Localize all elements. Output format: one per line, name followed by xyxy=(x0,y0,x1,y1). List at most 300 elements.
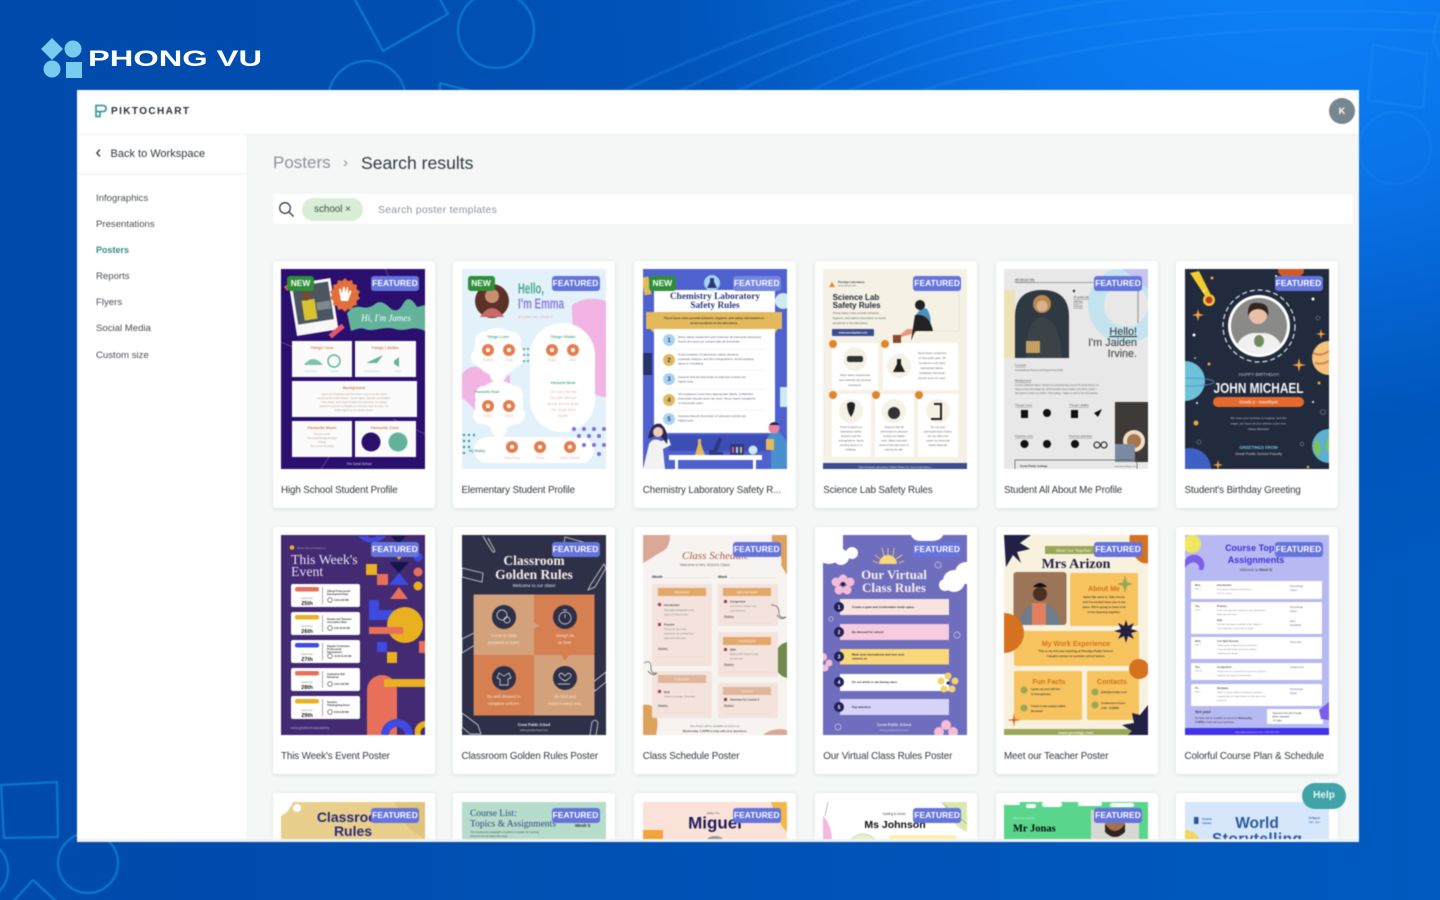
poster thumbnail: Miguel xyxy=(688,814,742,832)
poster thumbnail: Come to class xyxy=(491,633,516,638)
poster thumbnail: sentences, try to break them xyxy=(664,632,694,636)
poster thumbnail: alone in a building. xyxy=(678,362,704,366)
poster thumbnail: Quiz xyxy=(664,690,670,694)
poster thumbnail: Wednesday, 1:30PM to help with your questions. xyxy=(683,729,747,733)
card: Student All About Me Profile xyxy=(996,261,1158,508)
poster thumbnail: Practice xyxy=(664,622,675,626)
breadcrumb: › xyxy=(343,154,348,171)
poster thumbnail: magic, we hope all your wishes come true. xyxy=(1230,422,1286,426)
card title: Colorful Course Plan & Schedule xyxy=(1184,750,1324,762)
poster thumbnail: Getting to know xyxy=(883,812,906,816)
poster thumbnail: Do not drink or eat during class xyxy=(852,680,898,684)
poster thumbnail: www.prestigelab.com xyxy=(838,330,868,334)
poster thumbnail: Practice xyxy=(1216,605,1227,608)
poster thumbnail: Chemistry Laboratory xyxy=(670,292,760,302)
poster thumbnail: hygiene, and safety information to avoid xyxy=(833,316,886,320)
poster thumbnail: I grew up in Argentina and lived there most of my life before xyxy=(321,393,388,396)
poster thumbnail: "Success is the sum of small xyxy=(1272,712,1301,715)
poster thumbnail: 2:30PM to help with your questions. xyxy=(1194,721,1235,724)
poster thumbnail: Class Rules xyxy=(862,580,926,595)
poster thumbnail: and minimize all chemical xyxy=(839,378,871,382)
poster thumbnail: Background xyxy=(1015,378,1031,382)
poster thumbnail: This Week's xyxy=(291,552,358,567)
poster thumbnail: Welcome to Week 5! xyxy=(1239,568,1272,572)
badge: new: NEW xyxy=(653,278,672,288)
poster thumbnail: September xyxy=(301,597,313,600)
breadcrumb: Posters xyxy=(273,153,331,172)
poster thumbnail: Background xyxy=(343,386,366,390)
poster thumbnail: Notes: xyxy=(724,704,734,708)
poster thumbnail: your reference. xyxy=(730,610,746,612)
badge: featured: FEATURED xyxy=(372,278,418,288)
poster thumbnail: I'm from California where I finished my schooling last year at The Great School. I'm xyxy=(1015,384,1099,387)
poster thumbnail: building. xyxy=(846,448,857,452)
poster thumbnail: Things I dislike xyxy=(371,346,399,350)
poster thumbnail: Bullet points helped to give xyxy=(730,653,759,656)
poster thumbnail: efforts, repeated." xyxy=(1272,716,1290,718)
poster thumbnail: Welcome to Mrs. Arizon's Class! xyxy=(680,563,730,567)
poster thumbnail: Hello, I'm xyxy=(707,811,719,815)
poster thumbnail: Assignments xyxy=(1227,555,1284,565)
poster thumbnail: left panel. xyxy=(1216,699,1226,702)
badge: featured xyxy=(913,276,961,290)
badge: featured xyxy=(913,542,961,556)
poster thumbnail: Feb 2 xyxy=(1194,610,1201,612)
poster thumbnail: Be kind and xyxy=(554,694,576,699)
poster thumbnail xyxy=(280,801,426,840)
poster thumbnail: Things I love xyxy=(310,346,334,350)
poster thumbnail: Tue, xyxy=(1194,605,1200,608)
poster thumbnail: Never leave containers xyxy=(918,351,947,355)
poster thumbnail: 10 years old • Grade 5 xyxy=(518,315,552,319)
poster thumbnail: 26th xyxy=(301,629,313,635)
card title: Elementary Student Profile xyxy=(462,484,575,496)
poster thumbnail: 5am - 6pm xyxy=(1309,822,1320,824)
logo: Phong Vu xyxy=(41,38,262,78)
poster thumbnail: Notes: xyxy=(724,615,734,619)
poster thumbnail: About Me xyxy=(1088,586,1120,593)
poster thumbnail: Mrs Arizon will be available at school on xyxy=(690,724,740,728)
poster thumbnail: Great School Lab xyxy=(838,284,857,288)
poster thumbnail: extinguishers. Avoid xyxy=(839,438,864,442)
navigation list: Custom size xyxy=(96,350,149,361)
poster thumbnail: toxic. Wash exposed xyxy=(881,438,907,442)
sidebar xyxy=(77,135,248,839)
poster thumbnail: 4 xyxy=(667,398,671,404)
poster thumbnail: Subject Coverage: Chemistry xyxy=(664,696,696,698)
poster thumbnail: Use lecture number 1 as xyxy=(730,605,757,608)
poster thumbnail: Week 5 xyxy=(574,823,590,828)
poster thumbnail: The Lord of the Rings xyxy=(310,445,335,448)
poster thumbnail: 28th xyxy=(301,685,313,691)
card: Classroom Golden Rules Poster xyxy=(453,527,615,774)
poster thumbnail: 27th xyxy=(301,657,313,663)
poster thumbnail: Noise xyxy=(395,369,402,373)
poster thumbnail: chemicals of unknown xyxy=(880,430,908,434)
poster thumbnail: 4 xyxy=(838,680,841,686)
poster thumbnail: Swimming xyxy=(305,369,318,373)
poster thumbnail: Recordings xyxy=(1290,687,1303,691)
poster thumbnail: prepared to learn. xyxy=(487,640,520,645)
poster thumbnail: Hello, xyxy=(518,280,544,298)
navigation list: Flyers xyxy=(96,297,122,308)
logo wordmark: PHONG VU xyxy=(88,46,262,71)
poster thumbnail: Great School Academy xyxy=(297,546,326,550)
poster thumbnail: Meet our Teacher xyxy=(1056,548,1091,553)
poster thumbnail: My Work Experience xyxy=(1042,641,1110,648)
badge: featured xyxy=(1094,542,1142,556)
poster thumbnail: working alone in a xyxy=(840,443,863,447)
poster thumbnail: Assignment xyxy=(730,600,745,604)
poster thumbnail: Forrest Gump xyxy=(314,433,330,436)
poster thumbnail: Favourite Book xyxy=(550,381,575,385)
poster thumbnail: TUESDAY xyxy=(674,678,690,682)
filter chip xyxy=(302,198,363,221)
poster thumbnail xyxy=(642,534,788,736)
navigation list xyxy=(96,193,155,361)
poster thumbnail: julie@prestige.com xyxy=(1100,690,1127,694)
poster thumbnail: toxicity are highly xyxy=(883,434,906,438)
poster thumbnail: Topics & Assignments xyxy=(470,820,556,830)
poster thumbnail: I taught science at a private school before. xyxy=(1047,654,1105,658)
poster thumbnail: www.greatschool.com xyxy=(880,728,909,732)
poster thumbnail: September xyxy=(301,681,313,684)
poster thumbnail: Video Games xyxy=(560,456,580,460)
poster thumbnail: All About Me xyxy=(1015,278,1035,282)
poster thumbnail: and I'm excited have you in my xyxy=(1083,600,1126,604)
poster thumbnail: September xyxy=(301,709,313,712)
poster thumbnail: complete uniform. xyxy=(487,701,520,706)
poster thumbnail: accidents in the laboratory. xyxy=(833,321,869,325)
poster thumbnail: Golden Rules xyxy=(495,567,572,582)
poster thumbnail: If there are any extra sentences, try to break them xyxy=(1216,609,1265,612)
poster thumbnail xyxy=(461,534,607,736)
bottom edge line xyxy=(77,839,1359,842)
poster thumbnail: - R Collier xyxy=(1272,720,1282,722)
poster thumbnail xyxy=(822,534,968,736)
poster thumbnail: showers and fire xyxy=(841,434,862,438)
poster thumbnail: Summary for Lecture 2 xyxy=(730,698,760,702)
card: Miguel xyxy=(634,793,796,839)
poster thumbnail: 3:00-5:00 PM xyxy=(334,599,349,602)
poster thumbnail: Regular Conference xyxy=(327,645,350,648)
poster thumbnail: best in 2-3 lines of text. xyxy=(664,614,689,616)
poster thumbnail: containers must have xyxy=(919,361,946,365)
poster thumbnail: Wed, xyxy=(1194,640,1201,643)
poster thumbnail: Hi, I'm James xyxy=(360,313,411,323)
poster thumbnail: dawn@greatschool.com | +00 000 000 xyxy=(1234,730,1279,734)
poster thumbnail: outcomes for the topics this week. xyxy=(470,835,507,838)
poster thumbnail: Notes xyxy=(1290,588,1297,592)
poster thumbnail: Things I Dislike xyxy=(550,335,575,339)
poster thumbnail: Official Professional xyxy=(327,590,350,593)
poster thumbnail: Know locations of xyxy=(840,425,862,429)
poster thumbnail: Avoid skin and eye contact with all chemicals. xyxy=(678,340,740,344)
poster thumbnail: leaving the lab. xyxy=(885,448,904,452)
badge: featured: FEATURED xyxy=(1095,278,1141,288)
poster thumbnail: Science Lab xyxy=(833,293,880,302)
poster thumbnail xyxy=(642,268,788,470)
poster thumbnail: 2 xyxy=(667,358,671,364)
poster thumbnail: GREETINGS FROM xyxy=(1239,445,1278,450)
card: Mr Jonas xyxy=(996,793,1158,839)
card: This Week's Event Poster xyxy=(272,527,434,774)
poster thumbnail: Wear safety equipments xyxy=(840,373,871,377)
poster thumbnail: eyewash stations, and fire extinguishers. Avoid working xyxy=(678,357,754,361)
badge: new xyxy=(287,276,314,290)
poster thumbnail: Great Public School xyxy=(877,722,912,727)
card: Elementary Student Profile xyxy=(453,261,615,508)
poster thumbnail: 3:00-5:00 PM xyxy=(334,683,349,686)
icon: magnifier xyxy=(278,201,294,218)
poster thumbnail: of chemicals open. xyxy=(678,401,704,405)
poster thumbnail: Zoom link xyxy=(1290,640,1301,644)
badge: featured xyxy=(1274,276,1322,290)
poster thumbnail: I have a new puppy called xyxy=(1031,704,1066,708)
poster thumbnail: Use the Link feature available at the toolbar to xyxy=(1216,623,1262,626)
poster thumbnail: Hello! xyxy=(1109,326,1137,338)
poster thumbnail: Do not utilize the xyxy=(928,434,949,438)
poster thumbnail: Parents and Teachers xyxy=(327,618,352,621)
poster thumbnail: areas of the skin prior to xyxy=(879,443,910,447)
poster thumbnail: Recordings xyxy=(1290,605,1303,609)
poster thumbnail: Pizza xyxy=(504,414,513,418)
poster thumbnail: Notes: xyxy=(658,704,668,708)
poster thumbnail: Teachers xyxy=(327,701,338,704)
poster thumbnail: JOHN MICHAEL xyxy=(1213,380,1303,397)
poster thumbnail: in Georgetown. xyxy=(1031,692,1052,696)
poster thumbnail: Favourite Music xyxy=(308,426,336,430)
poster thumbnail: Safety Rules xyxy=(833,301,881,310)
poster thumbnail: This introductory paragraph is excellent to explain the learning xyxy=(470,831,539,834)
card title: Chemistry Laboratory Safety R... xyxy=(643,484,781,496)
badge: featured: FEATURED xyxy=(372,810,418,820)
card title: Class Schedule Poster xyxy=(643,750,739,762)
poster thumbnail: class. We're going to have a lot xyxy=(1083,605,1125,609)
poster thumbnail: I'm Emma xyxy=(518,296,564,312)
avatar xyxy=(1329,98,1355,124)
poster thumbnail: Classroom xyxy=(317,809,389,825)
poster thumbnail: Mrs Arizon xyxy=(1042,557,1111,572)
poster thumbnail: 16 years old xyxy=(1074,295,1089,299)
poster thumbnail: Favourite Food xyxy=(474,390,499,394)
poster thumbnail: on time. xyxy=(557,640,572,645)
poster thumbnail: Great Public College xyxy=(1020,464,1048,468)
card: Ms Johnson xyxy=(815,793,977,839)
navigation list: Social Media xyxy=(96,323,151,334)
application window xyxy=(77,90,1359,842)
poster thumbnail: Great Public School Faculty xyxy=(1235,452,1282,456)
poster thumbnail xyxy=(822,802,968,840)
card title: This Week's Event Poster xyxy=(281,750,390,762)
top bar xyxy=(77,90,1359,135)
poster thumbnail: insert hyperlinks to your text or image. xyxy=(1216,627,1254,630)
poster thumbnail: Pay attention xyxy=(852,705,871,709)
poster thumbnail: Introduction xyxy=(664,603,680,607)
poster thumbnail: sewer for chemical xyxy=(927,438,950,442)
card title: Student's Birthday Greeting xyxy=(1184,484,1301,496)
navigation list: Reports xyxy=(96,271,130,282)
poster thumbnail: Course List: xyxy=(470,809,516,819)
poster thumbnail: Always be xyxy=(555,633,575,638)
poster thumbnail: Football xyxy=(329,369,339,373)
poster thumbnail xyxy=(1184,268,1330,470)
poster thumbnail: Rehearsal xyxy=(327,676,339,679)
poster thumbnail: This is my 3rd year teaching at Prestige Public School. xyxy=(1038,649,1114,653)
poster thumbnail: Week xyxy=(718,575,728,579)
poster thumbnail: All containers must have appropriate labels. Unlabeled xyxy=(678,392,753,396)
badge: featured: FEATURED xyxy=(1276,544,1321,554)
poster thumbnail: 160 lbs xyxy=(1074,300,1083,304)
poster thumbnail: Fun Facts xyxy=(1032,679,1066,686)
card: World Storytelling xyxy=(1176,793,1338,839)
poster thumbnail: 1 xyxy=(667,338,671,344)
poster thumbnail: exposures. xyxy=(848,383,862,387)
card title: High School Student Profile xyxy=(281,484,398,496)
poster thumbnail: FRIDAY xyxy=(741,690,754,694)
poster thumbnail: down into more lines. xyxy=(1216,613,1238,616)
poster thumbnail: 2:00 - 3:00PM xyxy=(1101,706,1120,710)
poster thumbnail: 9:00-10:00 AM xyxy=(334,627,350,630)
poster thumbnail: Quiz xyxy=(1290,619,1296,623)
poster thumbnail: Assignment xyxy=(1216,666,1231,669)
poster thumbnail: down into more lines. xyxy=(664,637,687,640)
help button xyxy=(1302,783,1346,809)
poster thumbnail: Computational Science and Engineering (CSE) xyxy=(1015,369,1063,372)
poster thumbnail: September xyxy=(301,653,313,656)
poster thumbnail: 2-3 lines of text. xyxy=(1216,592,1232,595)
poster thumbnail: Prestige Laboratory xyxy=(838,280,865,284)
poster thumbnail: Things I Love xyxy=(487,335,509,339)
poster thumbnail: www.greatcollege.com xyxy=(1114,465,1136,468)
badge: featured xyxy=(1094,276,1142,290)
poster thumbnail xyxy=(1003,534,1149,736)
breadcrumb xyxy=(273,153,474,173)
card: Meet our Teacher Poster xyxy=(996,527,1158,774)
poster thumbnail xyxy=(280,268,426,470)
filter chip: school × xyxy=(314,204,351,215)
poster thumbnail: maximize the impact of information. xyxy=(1216,674,1251,677)
poster thumbnail: Association Meet xyxy=(327,621,347,624)
poster thumbnail: Fri, xyxy=(1194,687,1199,690)
poster thumbnail: Know locations of laboratory safety showers, xyxy=(678,352,739,356)
badge: featured xyxy=(552,542,600,556)
poster thumbnail: WEDNESDAY xyxy=(736,590,758,594)
poster thumbnail: Central xyxy=(1202,817,1211,821)
poster thumbnail: Bugs xyxy=(548,358,556,362)
poster thumbnail xyxy=(1184,534,1330,736)
card: Course List xyxy=(453,793,615,839)
poster thumbnail: My Hobby xyxy=(468,449,485,453)
poster thumbnail: We hope your birthday is magical, and like xyxy=(1230,416,1286,420)
poster thumbnail: Notes: xyxy=(724,663,734,667)
poster thumbnail: Flowers xyxy=(482,358,494,362)
poster thumbnail: These basic rules provide behavior, xyxy=(833,311,880,315)
poster thumbnail: Recordings xyxy=(1290,584,1303,588)
poster thumbnail: Quiz xyxy=(1216,619,1223,622)
poster thumbnail: Thu, xyxy=(1194,666,1200,669)
poster thumbnail: Things I love xyxy=(1015,403,1032,407)
poster thumbnail xyxy=(642,801,788,840)
poster thumbnail: Classroom xyxy=(503,553,565,568)
badge: featured: FEATURED xyxy=(734,810,780,820)
poster thumbnail xyxy=(462,802,606,840)
poster thumbnail: These basic rules provide behavior, hygiene, and safety information to xyxy=(664,316,764,320)
poster thumbnail: Hello! My name is Julie Arizon xyxy=(1083,595,1125,599)
icon: chevron left xyxy=(96,148,101,158)
poster thumbnail: September xyxy=(301,625,313,628)
poster thumbnail: Our Virtual xyxy=(861,567,927,582)
poster thumbnail: Dogs xyxy=(505,358,513,362)
help button: Help xyxy=(1313,790,1335,801)
poster thumbnail: 5 xyxy=(667,417,671,423)
poster thumbnail: Feb 10 xyxy=(1194,670,1202,672)
badge: featured xyxy=(733,808,781,822)
badge: new xyxy=(468,276,494,290)
poster thumbnail: Happy Birthday! xyxy=(1247,427,1269,431)
card: Class Schedule Poster xyxy=(634,527,796,774)
poster thumbnail: Ms Johnson xyxy=(865,819,926,831)
poster thumbnail: Mon, xyxy=(1194,584,1201,587)
poster thumbnail: Summary xyxy=(1216,687,1229,690)
badge: new: NEW xyxy=(291,278,310,288)
badge: featured: FEATURED xyxy=(1095,810,1141,820)
poster thumbnail: Irvine. xyxy=(1108,348,1137,360)
poster thumbnail xyxy=(280,534,426,736)
badge: featured xyxy=(1094,808,1142,822)
poster thumbnail xyxy=(1184,802,1330,840)
breadcrumb: Search results xyxy=(361,153,473,173)
poster thumbnail: www.prestige.com xyxy=(1057,730,1094,735)
poster thumbnail: wanted to improve my English so now that I have the time, I've xyxy=(319,405,389,408)
poster thumbnail: The Great School xyxy=(347,462,372,466)
poster thumbnail: Professional xyxy=(327,648,342,651)
poster thumbnail: should never be used. xyxy=(918,376,946,380)
poster thumbnail: Description paragraph works best in xyxy=(1216,588,1252,591)
badge: new xyxy=(649,276,676,290)
poster thumbnail: Grasshoppers xyxy=(364,369,381,373)
badge: featured xyxy=(552,276,600,290)
poster thumbnail: Feb 1 xyxy=(1194,588,1201,590)
poster thumbnail: Contacts xyxy=(1097,679,1127,686)
card: Student's Birthday Greeting xyxy=(1176,261,1338,508)
poster thumbnail: 2 xyxy=(838,630,841,636)
badge: featured: FEATURED xyxy=(734,278,780,288)
poster thumbnail: Assume that all chemicals of unknown toxicity are xyxy=(678,375,746,379)
poster thumbnail: 29th xyxy=(301,713,313,719)
poster thumbnail: Ping Pong xyxy=(504,456,519,460)
badge: featured: FEATURED xyxy=(914,278,960,288)
poster thumbnail: Grade 2 - Amethyst xyxy=(1239,400,1278,405)
poster thumbnail: Courses xyxy=(1015,363,1027,367)
poster thumbnail: If there are any extra xyxy=(664,628,687,631)
poster thumbnail: 10:00-11:00 AM xyxy=(334,655,351,658)
poster thumbnail: The Cat in the Hat xyxy=(549,390,576,394)
poster thumbnail: Brownie! xyxy=(1031,709,1043,713)
poster thumbnail: The Little Mermaid xyxy=(549,396,576,400)
badge: featured: FEATURED xyxy=(914,810,960,820)
poster thumbnail: Things I dislike xyxy=(1069,403,1089,407)
poster thumbnail: Development xyxy=(327,651,342,654)
poster thumbnail: don't have to come in a uniform. Post-college, I aspire to work in the tech industry. xyxy=(1015,392,1099,395)
navigation list: Infographics xyxy=(96,193,148,204)
poster thumbnail: Mute your microphone and turn your xyxy=(852,652,906,656)
poster thumbnail: I'm Jaiden xyxy=(1088,337,1137,349)
wordmark: PIKTOCHART xyxy=(111,106,190,117)
poster thumbnail: camera on xyxy=(852,656,867,660)
poster thumbnail: 8:00-5:00 PM xyxy=(334,711,349,714)
poster thumbnail: I grew up and still live xyxy=(1031,687,1061,691)
